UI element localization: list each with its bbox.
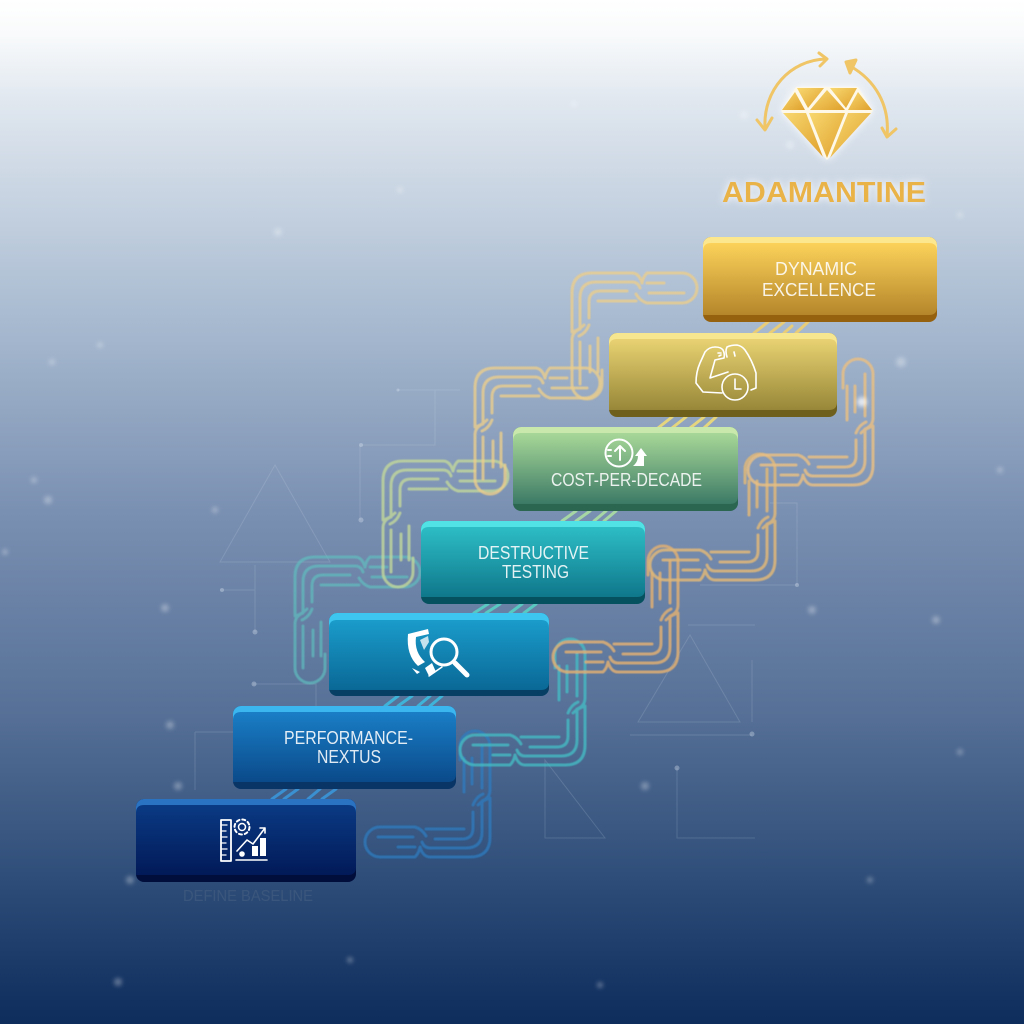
step 3: cost per decade xyxy=(513,427,738,511)
step 5: shield and magnifier xyxy=(329,613,549,696)
icon: coin with up arrows xyxy=(606,440,647,466)
chain: left side links xyxy=(295,273,697,683)
step 4: destructive testing xyxy=(421,521,645,604)
sparkle xyxy=(857,397,867,407)
step 4: destructive testing: TESTING xyxy=(502,562,569,582)
step 6: performance nextus xyxy=(233,706,456,789)
icon: cycle arrows xyxy=(757,53,896,137)
icon: flexed arm and clock xyxy=(696,345,756,400)
step 2: muscle and clock xyxy=(609,333,837,417)
title: ADAMANTINE xyxy=(722,177,926,209)
icon: cracked shield and magnifying glass xyxy=(408,629,467,676)
faint caption: define baseline: DEFINE BASELINE xyxy=(183,888,313,905)
step 1: dynamic excellence xyxy=(703,237,937,322)
icon: ruler, gear and growth chart xyxy=(221,820,267,861)
step 6: performance nextus: PERFORMANCE- xyxy=(284,728,413,748)
step 7: define baseline xyxy=(136,799,356,882)
step 6: performance nextus: NEXTUS xyxy=(317,747,381,767)
step 1: dynamic excellence: EXCELLENCE xyxy=(762,280,876,300)
step 3: cost per decade: COST-PER-DECADE xyxy=(551,470,702,490)
icon: diamond xyxy=(781,87,873,160)
step 4: destructive testing: DESTRUCTIVE xyxy=(478,543,589,563)
step 1: dynamic excellence: DYNAMIC xyxy=(775,259,857,279)
logo: diamond with cycle arrows xyxy=(722,53,926,209)
chain: right side links xyxy=(365,359,873,857)
hatch connectors between steps xyxy=(272,322,808,799)
